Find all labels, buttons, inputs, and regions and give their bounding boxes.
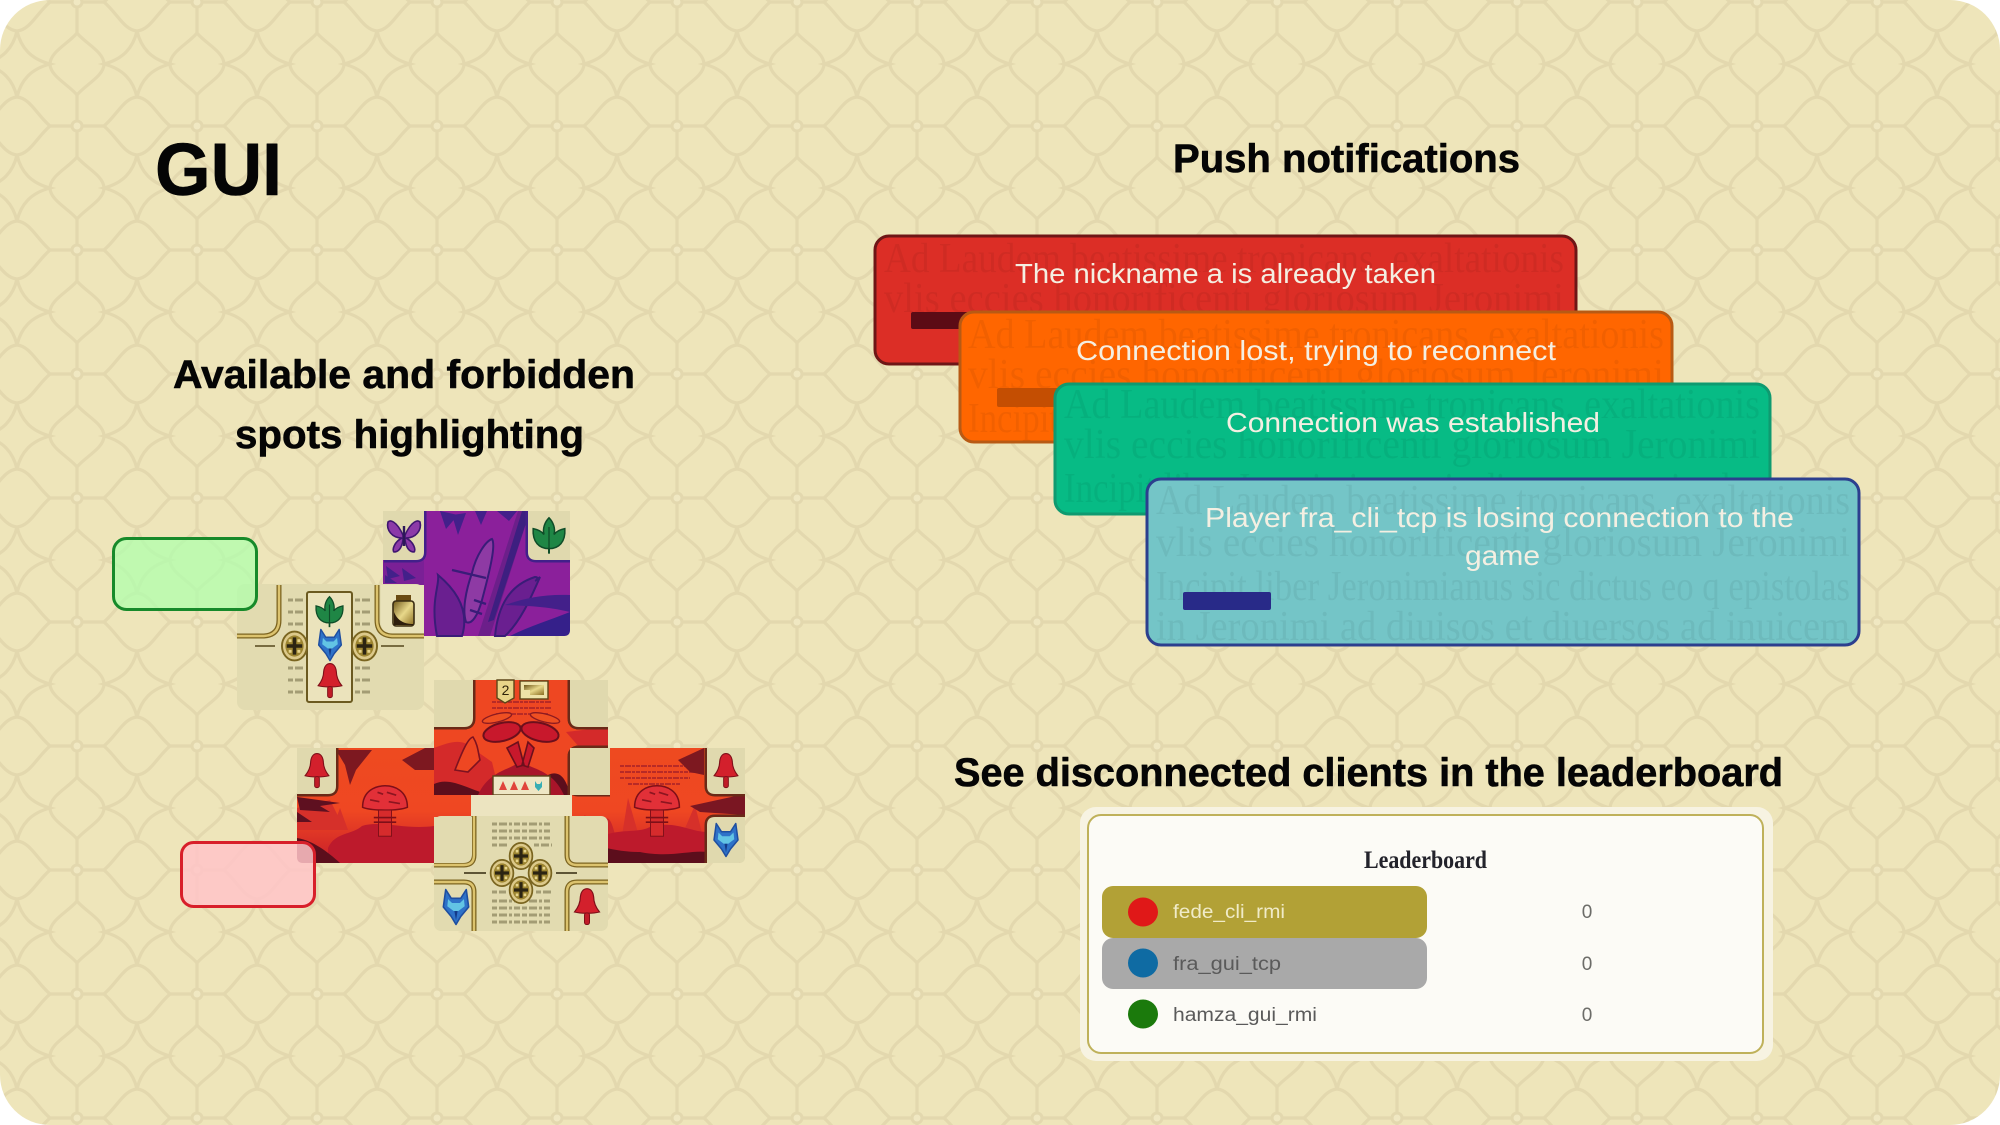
- row: fede_cli_rmi: [1102, 886, 1592, 938]
- notification: connection established: Incipit liber Jeronimianus sic dictus eo q epistolas: [1064, 466, 1760, 512]
- row: hamza_gui_rmi: [1128, 1000, 1592, 1028]
- card: bottom cream card: [434, 816, 608, 931]
- icon: jar: [393, 595, 414, 626]
- notification: connection lost: Incipit liber Jeronimianus sic dictus eo q epistolas: [968, 396, 1664, 442]
- card: top red gold-point card: 2: [502, 682, 510, 698]
- icon: leaf: [533, 518, 565, 554]
- card: purple insect: [383, 511, 570, 636]
- icon: butterfly: [388, 521, 420, 552]
- notification: player losing connection: [1147, 478, 1859, 650]
- notification: nickname taken: [875, 236, 1576, 364]
- card: right red mushroom: [570, 748, 745, 863]
- notification: connection established: [1055, 382, 1770, 514]
- row: fede_cli_rmi: 0: [1582, 902, 1592, 923]
- points badge: [497, 680, 514, 703]
- notification: nickname taken: Ad Laudem beatissime tronicans, exaltationis: [884, 236, 1564, 282]
- board of placed cards: [114, 511, 745, 931]
- available spot highlight: [114, 538, 256, 610]
- heading: push notifications: Push notifications: [1173, 137, 1520, 181]
- heading: available and forbidden spots: spots highlighting: [235, 413, 584, 457]
- heading: disconnected clients: See disconnected clients in the leaderboard: [954, 751, 1783, 795]
- leaderboard panel: [1080, 807, 1773, 1061]
- notification: player losing connection: in Jeronimi ad diuisos et diuersos ad inuicem: [1156, 604, 1850, 650]
- notification: player losing connection: Ad Laudem beatissime tronicans, exaltationis: [1156, 478, 1850, 524]
- notification: connection established: vlis eccies honorificenti gloriosum Jeronimi: [1064, 422, 1760, 468]
- heading: available and forbidden spots: [173, 353, 635, 457]
- scoring strip: [493, 776, 550, 795]
- forbidden spot highlight: [182, 842, 314, 906]
- notification: connection established: Connection was established: [1226, 407, 1600, 438]
- central strip: [307, 592, 352, 702]
- row: hamza_gui_rmi: 0: [1582, 1005, 1592, 1026]
- notification: player losing connection: Incipit liber Jeronimianus sic dictus eo q epistolas: [1156, 564, 1850, 610]
- title: GUI: GUI: [155, 128, 282, 211]
- notification: connection lost: Connection lost, trying to reconnect: [1076, 335, 1556, 366]
- heading: available and forbidden spots: Available and forbidden: [173, 353, 635, 397]
- card: left red mushroom: [297, 748, 472, 863]
- notification: player losing connection: vlis eccies honorificenti gloriosum Jeronimi: [1156, 520, 1850, 566]
- row: fra_gui_tcp: 0: [1582, 954, 1592, 975]
- card: cream resource card: [237, 584, 424, 710]
- gap between cards: [471, 795, 572, 816]
- notification: nickname taken: The nickname a is already taken: [1015, 258, 1436, 289]
- card: top red gold-point card: [434, 680, 610, 795]
- notification: connection established: Ad Laudem beatissime tronicans, exaltationis: [1064, 382, 1760, 428]
- notification: connection lost: vlis eccies honorificenti gloriosum Jeronimi: [968, 352, 1664, 398]
- push notification stack: [875, 236, 1859, 650]
- notification: nickname taken: vlis eccies honorificenti gloriosum Jeronimi: [884, 276, 1564, 322]
- notification: connection lost: Ad Laudem beatissime tronicans, exaltationis: [968, 312, 1664, 358]
- row: hamza_gui_rmi: hamza_gui_rmi: [1173, 1005, 1317, 1026]
- notification: player losing connection: game: [1465, 540, 1540, 571]
- row: fra_gui_tcp: [1102, 938, 1592, 989]
- notification: connection lost: [960, 312, 1672, 442]
- leaderboard title: Leaderboard: [1364, 847, 1487, 874]
- row: fede_cli_rmi: fede_cli_rmi: [1173, 902, 1285, 923]
- row: fra_gui_tcp: fra_gui_tcp: [1173, 954, 1281, 975]
- notification: player losing connection: Player fra_cli_tcp is losing connection to the: [1205, 502, 1794, 533]
